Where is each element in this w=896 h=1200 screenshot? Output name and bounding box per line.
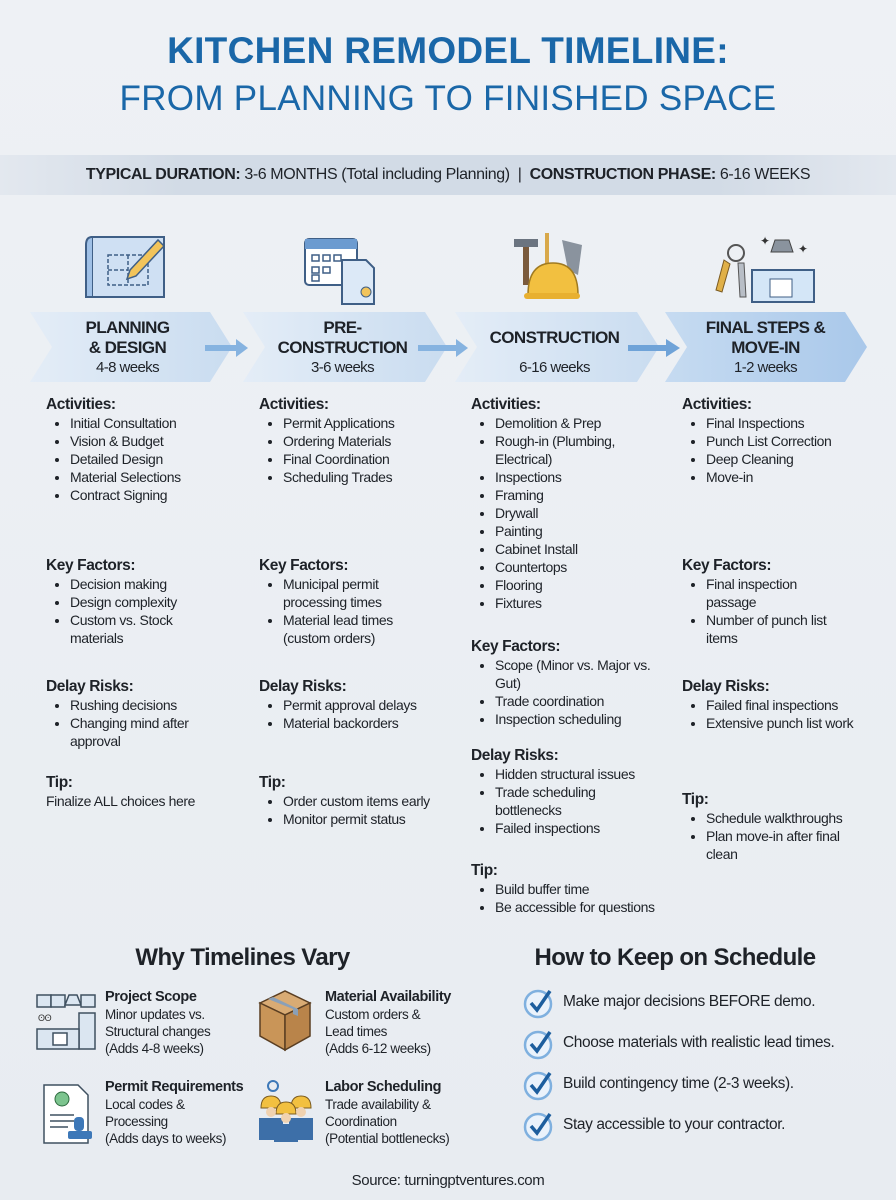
column: final steps: Failed final inspections: [706, 697, 838, 713]
column: final steps: Punch List Correction: [706, 433, 831, 449]
factor: project scope: [36, 989, 210, 1056]
column: pre-construction: Tip:: [259, 774, 286, 791]
checklist: Choose materials with realistic lead times.: [563, 1034, 834, 1051]
column: pre-construction: Final Coordination: [283, 451, 389, 467]
factor: labor scheduling: Coordination: [325, 1114, 397, 1129]
column: construction: Key Factors:: [471, 638, 560, 655]
column: final steps: Activities:: [682, 396, 752, 413]
factor: material availability: Material Availability: [325, 989, 451, 1005]
column: pre-construction: Permit approval delays: [283, 697, 417, 713]
phase labels: & DESIGN: [89, 338, 166, 357]
factor: labor scheduling: Labor Scheduling: [325, 1079, 441, 1095]
factor: permit requirements: Permit Requirements: [105, 1079, 243, 1095]
column: construction: Framing: [495, 487, 544, 503]
factor: material availability: [258, 989, 452, 1056]
phase chevrons: [30, 312, 867, 382]
icon: keys and kitchen: [716, 234, 814, 302]
column: final steps: Schedule walkthroughs: [706, 810, 842, 826]
factor: material availability: (Adds 6-12 weeks): [325, 1041, 431, 1056]
checklist: Make major decisions BEFORE demo.: [563, 993, 815, 1010]
column: planning: Initial Consultation: [70, 415, 176, 431]
factor: labor scheduling: [259, 1079, 449, 1146]
checklist: Stay accessible to your contractor.: [563, 1116, 785, 1133]
text: 1-2 weeks: [734, 359, 797, 376]
column: construction: Countertops: [495, 559, 567, 575]
column: final steps: Final inspection passage: [706, 576, 797, 610]
factor: permit requirements: [43, 1079, 244, 1146]
column: construction: Delay Risks:: [471, 747, 558, 764]
column: planning: Design complexity: [70, 594, 177, 610]
phase labels: [86, 318, 170, 376]
column: construction: Scope (Minor vs. Major vs. Gut): [495, 657, 650, 691]
checklist: Build contingency time (2-3 weeks).: [563, 1075, 794, 1092]
column: construction: Tip:: [471, 862, 498, 879]
column: planning: Custom vs. Stock materials: [70, 612, 173, 646]
column: final steps: Tip:: [682, 791, 709, 808]
text: MOVE-IN: [731, 338, 800, 357]
duration band: TYPICAL DURATION: 3-6 MONTHS (Total including Planning) | CONSTRUCTION PHASE: 6-16 WEEKS: [86, 166, 810, 183]
column: planning: Detailed Design: [70, 451, 163, 467]
factor: permit requirements: (Adds days to weeks): [105, 1131, 226, 1146]
column: planning: Contract Signing: [70, 487, 167, 503]
column: construction: Fixtures: [495, 595, 542, 611]
text: PRE-: [323, 318, 362, 337]
column: planning: Rushing decisions: [70, 697, 177, 713]
column: final steps: Plan move-in after final clean: [706, 828, 840, 862]
column: pre-construction: Monitor permit status: [283, 811, 405, 827]
column: final steps: Extensive punch list work: [706, 715, 853, 731]
factor: project scope: (Adds 4-8 weeks): [105, 1041, 204, 1056]
column: construction: Inspection scheduling: [495, 711, 621, 727]
checklist: [524, 990, 834, 1142]
text: 6-16 weeks: [519, 359, 590, 376]
factor: project scope: Project Scope: [105, 989, 196, 1005]
title: [120, 30, 776, 118]
column: planning: Changing mind after approval: [70, 715, 188, 749]
title: FROM PLANNING TO FINISHED SPACE: [120, 79, 776, 118]
column: pre-construction: Key Factors:: [259, 557, 348, 574]
factor: material availability: Lead times: [325, 1024, 387, 1039]
column: construction: [471, 396, 655, 915]
column: construction: Be accessible for questions: [495, 899, 655, 915]
icon: blueprint: [86, 237, 164, 297]
column: pre-construction: Order custom items early: [283, 793, 430, 809]
column: planning: Decision making: [70, 576, 167, 592]
column: final steps: Key Factors:: [682, 557, 771, 574]
column: construction: Activities:: [471, 396, 541, 413]
factor: project scope: ʘʘ: [38, 1013, 52, 1023]
factor: project scope: Minor updates vs.: [105, 1007, 205, 1022]
column: planning: Vision & Budget: [70, 433, 163, 449]
factor: permit requirements: Processing: [105, 1114, 168, 1129]
icon: keys and kitchen: ✦: [760, 234, 770, 248]
arrows: [205, 339, 680, 357]
column: construction: Demolition & Prep: [495, 415, 601, 431]
column: pre-construction: Activities:: [259, 396, 329, 413]
icons: [85, 233, 815, 305]
factor: labor scheduling: Trade availability &: [325, 1097, 431, 1112]
column: final steps: Deep Cleaning: [706, 451, 793, 467]
column: construction: Build buffer time: [495, 881, 589, 897]
column: planning: Material Selections: [70, 469, 181, 485]
column: construction: Flooring: [495, 577, 542, 593]
column: construction: Cabinet Install: [495, 541, 578, 557]
text: 3-6 weeks: [311, 359, 374, 376]
column: construction: Failed inspections: [495, 820, 600, 836]
column: pre-construction: Ordering Materials: [283, 433, 391, 449]
factor: labor scheduling: (Potential bottlenecks): [325, 1131, 449, 1146]
factor: project scope: Structural changes: [105, 1024, 210, 1039]
icon: keys and kitchen: ✦: [798, 242, 808, 256]
factor: permit requirements: Local codes &: [105, 1097, 185, 1112]
column: final steps: Delay Risks:: [682, 678, 769, 695]
column: planning: Delay Risks:: [46, 678, 133, 695]
column: construction: Inspections: [495, 469, 561, 485]
column: pre-construction: Delay Risks:: [259, 678, 346, 695]
column: construction: Trade scheduling bottlenecks: [495, 784, 595, 818]
column: pre-construction: Material backorders: [283, 715, 398, 731]
column: pre-construction: Permit Applications: [283, 415, 394, 431]
phase labels: 4-8 weeks: [96, 359, 159, 376]
column: pre-construction: [259, 396, 430, 827]
column: final steps: [682, 396, 854, 862]
column: planning: Finalize ALL choices here: [46, 793, 195, 809]
column: construction: Drywall: [495, 505, 538, 521]
column: planning: [46, 396, 195, 809]
text: CONSTRUCTION: [278, 338, 407, 357]
column: planning: Key Factors:: [46, 557, 135, 574]
column: final steps: Final Inspections: [706, 415, 804, 431]
column: construction: Hidden structural issues: [495, 766, 635, 782]
source: Source: turningptventures.com: [352, 1172, 544, 1189]
duration band: [0, 155, 896, 195]
icon: tools and hard hat: [514, 233, 582, 299]
column: pre-construction: Material lead times (custom orders): [283, 612, 393, 646]
column: pre-construction: Scheduling Trades: [283, 469, 392, 485]
text: CONSTRUCTION: [490, 328, 619, 347]
column: planning: Activities:: [46, 396, 116, 413]
text: FINAL STEPS &: [706, 318, 825, 337]
column: planning: Tip:: [46, 774, 73, 791]
column: construction: Rough-in (Plumbing, Electrical): [495, 433, 615, 467]
icon: calendar and document: [305, 239, 374, 304]
column: final steps: Number of punch list items: [706, 612, 826, 646]
column: pre-construction: Municipal permit processing times: [283, 576, 382, 610]
title: KITCHEN REMODEL TIMELINE:: [167, 30, 729, 71]
heading: how to keep on schedule: How to Keep on Schedule: [535, 944, 815, 971]
phase labels: PLANNING: [86, 318, 169, 337]
heading: why timelines vary: Why Timelines Vary: [135, 944, 350, 971]
column: construction: Trade coordination: [495, 693, 604, 709]
column: final steps: Move-in: [706, 469, 753, 485]
factor: material availability: Custom orders &: [325, 1007, 420, 1022]
column: construction: Painting: [495, 523, 542, 539]
